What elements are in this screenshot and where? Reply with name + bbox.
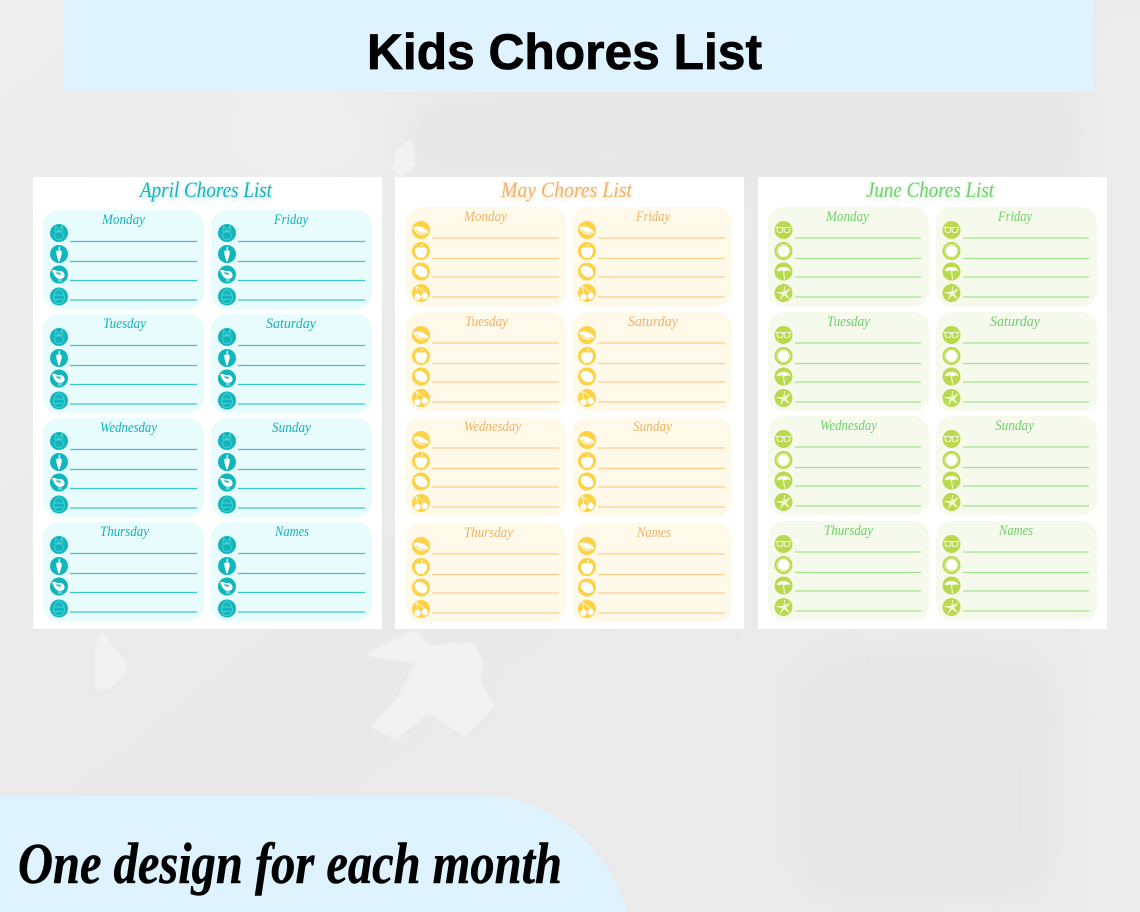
panel: April chores list	[33, 177, 382, 629]
card: Monday: Monday	[825, 209, 869, 225]
card: Tuesday	[768, 312, 929, 412]
card: Names	[211, 522, 372, 622]
card: Tuesday	[406, 312, 566, 412]
card: Sunday	[936, 416, 1097, 516]
card: Names: Names	[274, 524, 309, 540]
card: Monday	[406, 207, 566, 306]
card: Friday: Friday	[997, 209, 1032, 225]
caption: One design for each month: One design for each month	[18, 831, 562, 896]
card: Monday: Monday	[101, 212, 145, 228]
card: Sunday: Sunday	[995, 418, 1034, 434]
card: Saturday	[572, 312, 732, 412]
heading: May Chores List: May Chores List	[500, 177, 633, 202]
card: Wednesday: Wednesday	[820, 418, 877, 434]
card: Friday	[211, 210, 372, 310]
card: Saturday: Saturday	[990, 314, 1040, 330]
panel: June chores list	[758, 177, 1107, 629]
card: Wednesday: Wednesday	[100, 420, 157, 436]
card: Thursday	[43, 522, 204, 622]
heading: April Chores List: April Chores List	[138, 177, 273, 202]
card: Names: Names	[998, 523, 1033, 539]
card: Saturday: Saturday	[266, 316, 316, 332]
card: Saturday: Saturday	[628, 314, 678, 330]
card: Wednesday	[43, 418, 204, 518]
card: Names	[936, 521, 1097, 620]
card: Friday: Friday	[635, 209, 670, 225]
card: Names	[572, 523, 732, 622]
card: Names: Names	[636, 525, 671, 541]
card: Wednesday: Wednesday	[464, 419, 521, 435]
card: Thursday: Thursday	[464, 525, 513, 541]
card: Tuesday: Tuesday	[103, 316, 146, 332]
card: Sunday	[572, 417, 732, 516]
card: Thursday: Thursday	[100, 524, 149, 540]
bottom callout	[0, 796, 627, 912]
card: Wednesday	[406, 417, 566, 516]
card: Wednesday	[768, 416, 929, 516]
card: Thursday: Thursday	[824, 523, 873, 539]
card: Friday	[936, 207, 1097, 306]
card: Thursday	[406, 523, 566, 622]
card: Friday: Friday	[273, 212, 308, 228]
card: Tuesday: Tuesday	[827, 314, 870, 330]
card: Monday	[768, 207, 929, 306]
card: Sunday: Sunday	[633, 419, 672, 435]
card: Monday: Monday	[463, 209, 507, 225]
card: Saturday	[211, 314, 372, 414]
card: Thursday	[768, 521, 929, 620]
heading: June Chores List: June Chores List	[866, 177, 995, 202]
card: Sunday: Sunday	[272, 420, 311, 436]
card: Tuesday	[43, 314, 204, 414]
title banner	[63, 0, 1093, 92]
card: Sunday	[211, 418, 372, 518]
title: Kids Chores List: Kids Chores List	[367, 24, 762, 80]
card: Tuesday: Tuesday	[465, 314, 508, 330]
panel: May chores list	[395, 177, 744, 629]
card: Saturday	[936, 312, 1097, 412]
card: Monday	[43, 210, 204, 310]
card: Friday	[572, 207, 732, 306]
